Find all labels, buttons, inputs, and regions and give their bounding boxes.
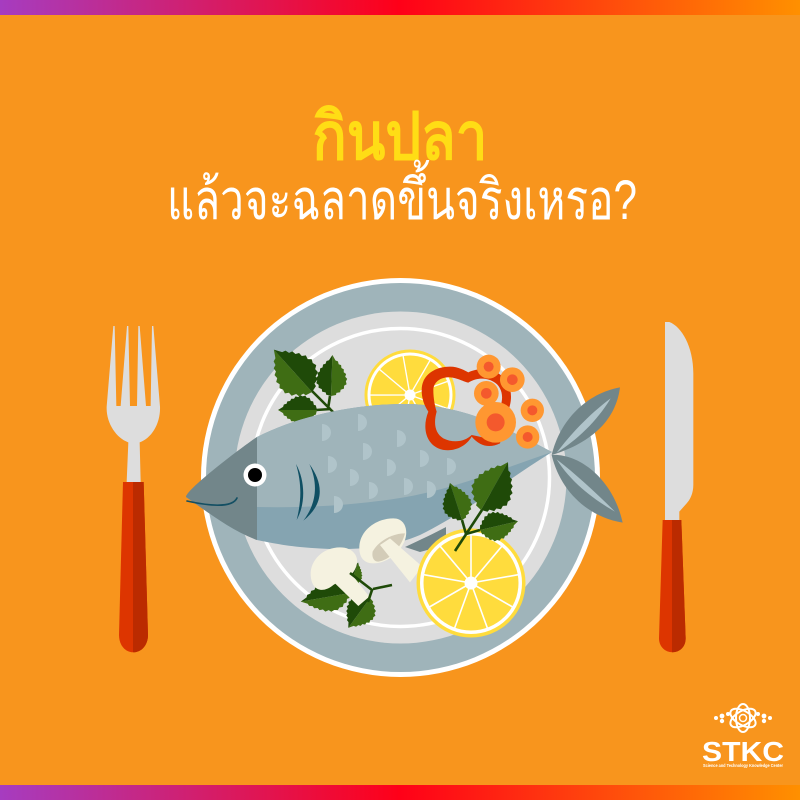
mushrooms <box>311 518 422 606</box>
fish scales <box>322 414 456 513</box>
logo dots <box>714 712 772 723</box>
title line 1: กินปลา <box>312 99 488 173</box>
leaf sprig top left <box>258 335 348 425</box>
fish <box>186 387 623 552</box>
icon: fork <box>107 326 160 652</box>
fish belly shadow <box>405 527 446 552</box>
logo: STKC <box>702 704 784 768</box>
fish eye <box>244 464 266 486</box>
carrot slices <box>474 355 544 449</box>
fish mouth <box>187 498 237 505</box>
title <box>167 99 637 231</box>
plate rim <box>201 278 600 677</box>
fish body <box>186 404 552 549</box>
plate <box>201 278 600 677</box>
title line 2: แล้วจะฉลาดขึ้นจริงเหรอ? <box>167 160 637 231</box>
logo wordmark: STKC <box>702 736 784 767</box>
logo atom icon <box>727 704 759 732</box>
fish tail <box>552 387 623 523</box>
bell pepper ring <box>422 367 511 450</box>
fish head <box>186 437 257 540</box>
leaf sprig bottom <box>298 559 382 637</box>
fish upper back <box>186 404 552 507</box>
top gradient bar <box>0 0 800 15</box>
fish gills <box>296 464 320 521</box>
mushroom left <box>311 547 369 606</box>
mushroom right <box>359 518 422 582</box>
small lemon slice <box>364 348 456 440</box>
logo tagline: Science and Technology Knowledge Center <box>703 763 783 768</box>
icon: knife <box>659 322 693 652</box>
bottom gradient bar <box>0 785 800 800</box>
stem of bottom sprig <box>350 573 392 602</box>
large lemon slice <box>416 528 526 638</box>
leaf sprig on lemon <box>436 452 526 551</box>
plate well <box>234 312 566 644</box>
